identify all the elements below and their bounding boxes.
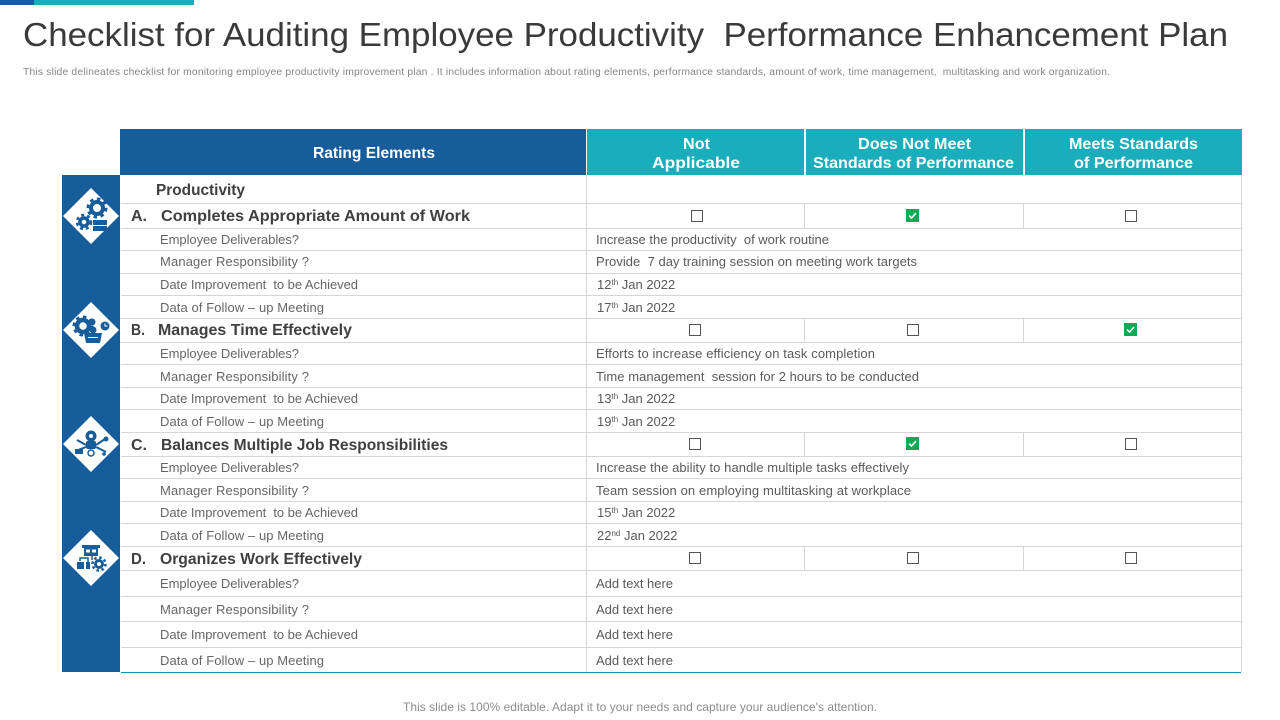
icon: gears and briefcase — [63, 188, 119, 244]
section C: Employee Deliverables? — [160, 460, 299, 475]
section A: Jan 2022 — [618, 300, 675, 315]
section D: D. — [131, 551, 146, 568]
section A: Manager Responsibility ? — [160, 254, 309, 269]
section B: Jan 2022 — [618, 414, 675, 429]
table header: Not — [683, 136, 710, 153]
section A: Jan 2022 — [618, 277, 675, 292]
section A: Increase the productivity of work routine — [596, 232, 829, 247]
section D: Add text here — [596, 576, 673, 591]
table header: of Performance — [1074, 155, 1193, 172]
section C: 15 — [597, 505, 611, 520]
icon: multitasking figure — [63, 416, 119, 472]
section B: th — [611, 392, 618, 401]
section C: th — [611, 506, 618, 515]
section C: Increase the ability to handle multiple tasks effectively — [596, 460, 910, 475]
section A: Provide 7 day training session on meeting work targets — [596, 254, 918, 269]
section D: Add text here — [596, 602, 673, 617]
section D: Add text here — [596, 627, 673, 642]
section B: Jan 2022 — [618, 391, 675, 406]
section C: Jan 2022 — [618, 505, 675, 520]
section C: Data of Follow – up Meeting — [160, 528, 324, 543]
section B: 19 — [597, 414, 611, 429]
panel: checklist table — [120, 129, 1242, 672]
section D: Manager Responsibility ? — [160, 602, 309, 617]
section D — [131, 551, 1136, 668]
section D: Organizes Work Effectively — [160, 551, 362, 568]
section C: Date Improvement to be Achieved — [160, 505, 358, 520]
heading: productivity: Productivity — [156, 182, 245, 199]
section B: Efforts to increase efficiency on task completion — [596, 346, 875, 361]
top accent bar — [0, 0, 194, 5]
section B: Time management session for 2 hours to be conducted — [596, 369, 919, 384]
section C: Jan 2022 — [620, 528, 677, 543]
section A: 17 — [597, 300, 611, 315]
icon: organization board and gear — [63, 530, 119, 586]
section C: Team session on employing multitasking at workplace — [596, 483, 911, 498]
table header: Rating Elements — [313, 145, 435, 162]
section B: th — [611, 415, 618, 424]
section B: 13 — [597, 391, 611, 406]
section B: Manages Time Effectively — [158, 322, 352, 339]
section D: Employee Deliverables? — [160, 576, 299, 591]
section D: Date Improvement to be Achieved — [160, 627, 358, 642]
section A: Data of Follow – up Meeting — [160, 300, 324, 315]
section C: nd — [611, 529, 620, 538]
section C: Balances Multiple Job Responsibilities — [161, 437, 448, 454]
footer note: This slide is 100% editable. Adapt it to your needs and capture your audience's attention. — [403, 700, 877, 714]
table header: Standards of Performance — [813, 155, 1014, 172]
section A: th — [611, 278, 618, 287]
section A: Employee Deliverables? — [160, 232, 299, 247]
section D: Data of Follow – up Meeting — [160, 653, 324, 668]
section B: Date Improvement to be Achieved — [160, 391, 358, 406]
panel: icon sidebar — [62, 175, 120, 672]
section C: C. — [131, 437, 147, 454]
section B: Data of Follow – up Meeting — [160, 414, 324, 429]
table grid lines — [121, 175, 1242, 672]
section A: 12 — [597, 277, 611, 292]
section B: Employee Deliverables? — [160, 346, 299, 361]
title: Checklist for Auditing Employee Productivity Performance Enhancement Plan — [23, 16, 1228, 53]
section B: Manager Responsibility ? — [160, 369, 309, 384]
subtitle: This slide delineates checklist for monitoring employee productivity improvement plan . It includes information about rating elements, performance standards, amount of work, time management, multitasking and work organization. — [23, 67, 1110, 78]
icon: gear, clock and basket — [63, 302, 119, 358]
section A: Completes Appropriate Amount of Work — [161, 208, 470, 225]
section A: Date Improvement to be Achieved — [160, 277, 358, 292]
table header: Does Not Meet — [858, 136, 971, 153]
section B: B. — [131, 322, 145, 339]
section C — [131, 437, 1136, 543]
section D: Add text here — [596, 653, 673, 668]
table header — [120, 129, 1242, 175]
section A — [131, 208, 1136, 315]
section A: A. — [131, 208, 147, 225]
section B — [131, 322, 1137, 429]
table header: Applicable — [652, 155, 740, 172]
section A: th — [611, 301, 618, 310]
section C: 22 — [597, 528, 611, 543]
table header: Meets Standards — [1069, 136, 1198, 153]
section C: Manager Responsibility ? — [160, 483, 309, 498]
